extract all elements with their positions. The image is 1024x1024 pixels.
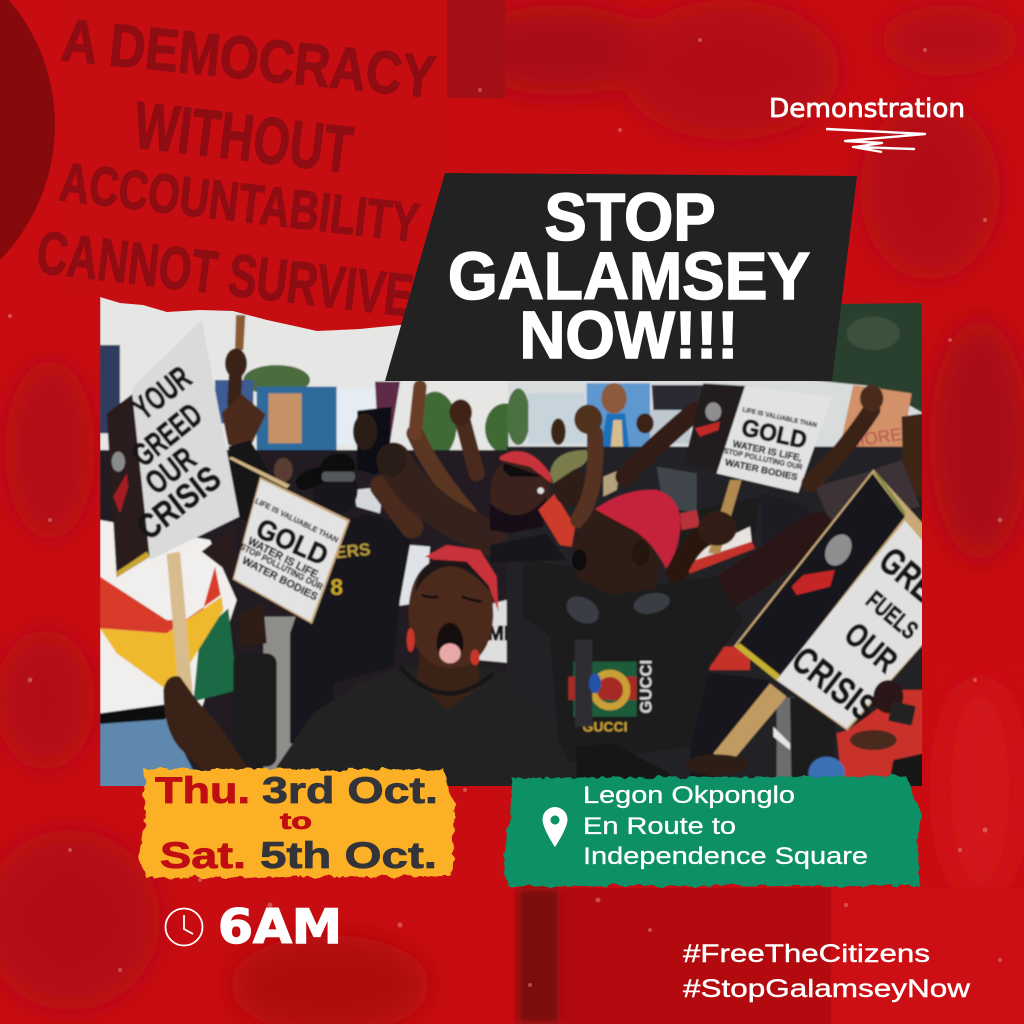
- ghost placard slogan: ACCOUNTABILITY: [57, 150, 422, 254]
- photo right half: GUCCI: [582, 719, 628, 735]
- photo right half: [490, 300, 959, 800]
- ghost placard slogan: CANNOT SURVIVE: [33, 218, 417, 330]
- photo right half: WATER IS LIFE,: [731, 439, 803, 464]
- hashtags: #StopGalamseyNow: [683, 975, 971, 1003]
- cardboard lower edge: [815, 460, 920, 522]
- photo right half: MORE: [849, 424, 903, 451]
- title banner: GALAMSEY: [448, 239, 810, 314]
- photo left half: YOUR: [125, 359, 198, 427]
- location panel: Independence Square: [583, 843, 868, 870]
- olive cap man: [554, 470, 585, 506]
- photo right half: CRISIS: [784, 638, 885, 730]
- time: [166, 900, 342, 955]
- scribble underline: [826, 129, 925, 152]
- panel: torn red paper strip over photo: [60, 0, 447, 331]
- date panel: 3rd Oct.: [262, 770, 438, 811]
- time: 6AM: [218, 900, 342, 955]
- heading: demonstration: [769, 94, 965, 152]
- title banner: [385, 173, 857, 381]
- photo right half: GREE: [872, 539, 959, 621]
- photo left half: WATER IS LIFE,: [246, 535, 322, 582]
- photo left half: MINI: [487, 622, 529, 645]
- hand and phone: [162, 675, 248, 771]
- sign three: [685, 383, 747, 474]
- date panel: to: [280, 808, 312, 834]
- lower right figure: [836, 688, 922, 778]
- photo left half: STOP POLLUTING OUR: [238, 541, 325, 592]
- foreground shoulder and hand: [507, 687, 575, 797]
- photo right half: STOP POLLUTING OUR: [723, 446, 804, 472]
- photo right half: OUR: [838, 615, 905, 680]
- icon: clock: [166, 908, 202, 946]
- photo left half: ERS: [334, 539, 371, 563]
- location panel: [503, 776, 922, 886]
- title banner: NOW!!!: [520, 298, 738, 373]
- icon: map pin: [542, 807, 568, 847]
- sign four: [713, 683, 787, 764]
- location panel: Legon Okponglo: [583, 782, 795, 809]
- ghost placard slogan: WITHOUT: [130, 87, 357, 187]
- second sign: [228, 457, 290, 488]
- date panel: Thu.: [155, 770, 250, 811]
- photo left half: GOLD: [252, 513, 333, 571]
- date panel: [139, 769, 455, 878]
- photo right half: Quarry: [850, 443, 899, 468]
- ghost placard slogan: A DEMOCRACY: [59, 6, 439, 111]
- photo right half: WATER BODIES: [724, 457, 799, 482]
- photo left half: CRISIS: [130, 459, 228, 548]
- photo left half: 8: [330, 574, 343, 600]
- MINING banner: [478, 598, 508, 664]
- photo left half: [100, 315, 529, 797]
- date panel: Sat.: [160, 835, 246, 876]
- photo left half: WATER BODIES: [240, 555, 320, 603]
- centre man: [723, 530, 817, 593]
- photo right half: LIFE IS VALUABLE THAN: [742, 407, 818, 429]
- boy: [276, 700, 334, 770]
- striped jacket man: [680, 498, 760, 546]
- heading: demonstration: Demonstration: [769, 94, 965, 124]
- first sign: [107, 388, 150, 577]
- photo left half: GREED: [125, 395, 209, 473]
- hashtags: #FreeTheCitizens: [683, 940, 930, 968]
- ghost placard slogan: [33, 6, 439, 330]
- photo right half: GOLD: [739, 414, 809, 454]
- background arms: [415, 433, 468, 513]
- photo right half: GUCCI: [636, 660, 655, 713]
- panel: protest photograph: [100, 296, 959, 800]
- hashtags: [683, 940, 971, 1003]
- photo left half: LIFE IS VALUABLE THAN: [254, 496, 340, 545]
- photo left half: OUR: [138, 439, 203, 501]
- dark circle at left edge: [0, 0, 55, 318]
- gucci print: [573, 662, 637, 717]
- location panel: En Route to: [583, 813, 736, 840]
- raised arm: [393, 460, 523, 548]
- photo right half: FUELS: [860, 586, 923, 645]
- sunglasses man: [490, 455, 550, 532]
- hat man: [290, 513, 413, 747]
- title banner: STOP: [544, 180, 716, 255]
- date panel: 5th Oct.: [260, 835, 437, 876]
